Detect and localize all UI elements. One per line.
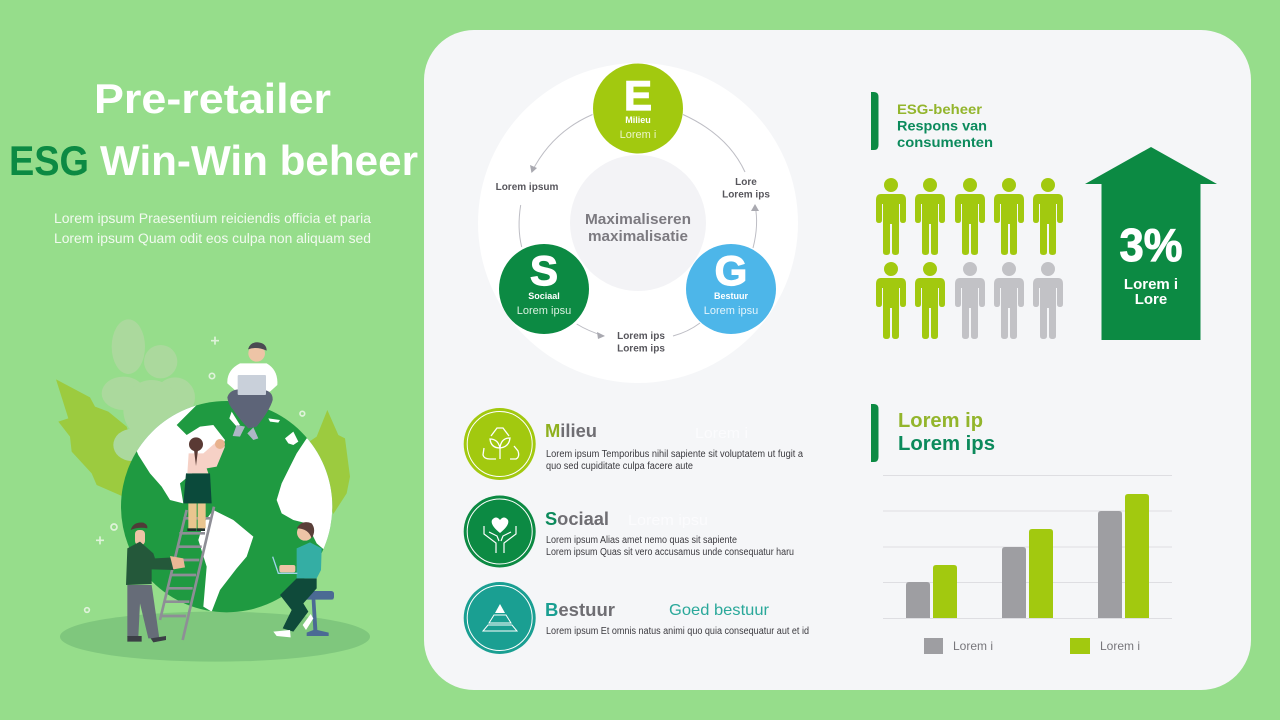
heading — [898, 410, 995, 455]
bar chart — [883, 476, 1172, 618]
centre label — [585, 212, 691, 245]
arc labels — [496, 177, 770, 354]
node: E Milieu: Milieu — [625, 115, 651, 125]
node: S Sociaal: Sociaal — [528, 291, 560, 301]
arc labels: Lorem ips — [722, 190, 770, 200]
node: E Milieu: E — [624, 72, 652, 119]
panel: main white card — [424, 30, 1251, 690]
item: Milieu: Lorem ipsum Temporibus nihil sapiente sit voluptatem ut fugit a — [546, 449, 803, 460]
subtitle text — [54, 211, 371, 246]
heading: Respons van — [897, 118, 987, 134]
item: Sociaal: Lorem ipsum Alias amet nemo quas sit sapiente — [546, 535, 737, 546]
node: S Sociaal — [499, 244, 589, 334]
node: S Sociaal: S — [530, 247, 558, 294]
node: G Bestuur: Bestuur — [714, 291, 748, 301]
arrow callout: 3%: Lore — [1135, 291, 1167, 308]
node: G Bestuur — [686, 244, 776, 334]
item: Bestuur: Lorem ipsum Et omnis natus animi quo quia consequatur aut et id — [546, 626, 809, 637]
title: ESG — [9, 137, 89, 184]
heading: Lorem ips — [898, 433, 995, 455]
heading: Lorem ip — [898, 410, 983, 432]
item: Milieu — [464, 408, 803, 480]
title — [9, 75, 418, 184]
subtitle text: Lorem ipsum Quam odit eos culpa non aliquam sed — [54, 231, 371, 246]
title: Pre-retailer — [94, 75, 331, 122]
arc labels: Lorem ips — [617, 344, 665, 354]
heading accent bar — [871, 92, 878, 150]
chart legend: Lorem i — [1100, 639, 1140, 653]
item: Bestuur: Goed bestuur — [669, 602, 770, 619]
node: S Sociaal: Lorem ipsu — [517, 305, 571, 317]
item: Milieu: quo sed cupiditate culpa facere aute — [546, 461, 693, 472]
item: Milieu: Lorem i — [695, 425, 748, 442]
panel: consumer response — [871, 92, 1217, 340]
item: Sociaal: Lorem ipsum Quas sit vero accusamus unde consequatur haru — [546, 547, 794, 558]
arc labels: Lorem ipsum — [496, 182, 558, 193]
item: Sociaal — [464, 496, 794, 568]
node: E Milieu: Lorem i — [620, 129, 656, 141]
cycle arcs — [519, 114, 759, 339]
title: Win-Win beheer — [100, 137, 418, 184]
item: Bestuur: Bestuur — [545, 600, 615, 620]
centre label: maximalisatie — [588, 229, 688, 245]
item: Bestuur — [464, 582, 809, 654]
chart legend — [924, 638, 1140, 654]
illustration: people around the globe — [56, 319, 370, 662]
item: Sociaal: Lorem ipsu — [628, 512, 708, 529]
chart legend: Lorem i — [953, 639, 993, 653]
item: Milieu: Milieu — [545, 421, 597, 441]
heading: ESG-beheer — [897, 101, 983, 117]
heading accent bar — [871, 404, 878, 462]
panel: bar chart section — [871, 404, 1172, 654]
pictogram: people 7 of 10 — [876, 178, 1063, 339]
subtitle text: Lorem ipsum Praesentium reiciendis officia et paria — [54, 211, 371, 226]
arrow callout: 3%: 3% — [1120, 219, 1182, 271]
centre label: Maximaliseren — [585, 212, 691, 228]
node: G Bestuur: G — [715, 247, 747, 294]
heading — [897, 101, 993, 150]
arc labels: Lore — [735, 177, 757, 188]
arrow callout: 3% — [1085, 147, 1217, 340]
panel: ESG pillar list — [464, 408, 809, 654]
heading: consumenten — [897, 134, 993, 150]
panel: ESG cycle diagram — [478, 63, 798, 383]
node: E Milieu — [593, 64, 683, 154]
item: Sociaal: Sociaal — [545, 509, 609, 529]
node: G Bestuur: Lorem ipsu — [704, 305, 758, 317]
arrow callout: 3%: Lorem i — [1124, 276, 1178, 293]
arc labels: Lorem ips — [617, 331, 665, 342]
